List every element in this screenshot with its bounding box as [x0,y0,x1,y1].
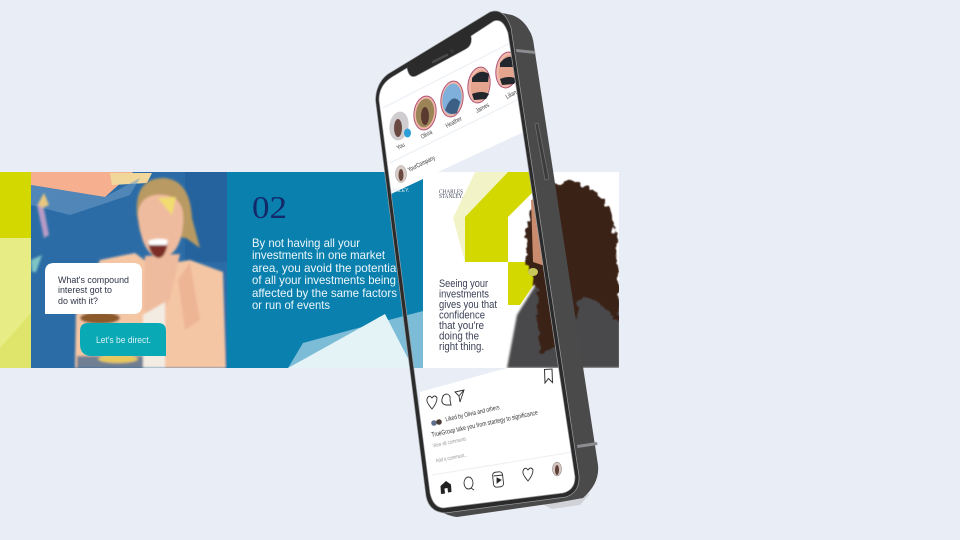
body text: affected by the same factors [252,287,397,300]
body text: area, you avoid the potential [252,262,399,275]
phone screen: stories header [380,21,522,194]
body text: or run of events [252,299,330,312]
caption: Seeing your [439,278,488,290]
panel: blue statistic card [227,172,423,368]
icon: send [455,390,464,402]
caption [439,278,497,353]
phone side body [440,12,598,517]
chat bubble: question [45,263,142,314]
story: James [467,66,491,113]
body text [252,237,399,312]
post author: YourCompany [407,155,437,174]
chat bubble: question: interest got to [58,285,112,296]
icon: profile avatar [552,462,562,476]
story: You: You [396,142,406,152]
liked by row: Liked by Olivia and others [445,405,500,424]
add comment: Add a comment... [435,452,468,465]
story: You [389,112,411,150]
icon: reels [492,472,504,487]
body text: of all your investments being [252,274,396,287]
chat bubble: answer [80,323,166,356]
chat bubble: question: What's compound [58,275,129,286]
icon: comment [442,394,451,405]
caption: gives you that [439,299,497,311]
post caption: TrueGroup take you from startegy to significance [431,410,539,439]
body text: investments in one market [252,249,386,262]
caption: that you're [439,320,484,332]
chat bubble: answer: Let's be direct. [96,335,151,346]
story: James: James [475,102,491,115]
number: 02 [252,189,287,225]
story: Lilian: Lilian [505,90,518,101]
phone screen: post actions and tab bar [420,368,574,508]
post author [396,155,437,182]
icon: heart [427,396,437,409]
body text: By not having all your [252,237,360,250]
infographic canvas [0,10,619,517]
phone screen: stories header: STANLEY. [386,188,409,194]
story: Olivia [413,96,437,138]
view comments: View all comments [432,436,467,450]
chat bubble: question: do with it? [58,296,98,307]
panel: white card with lime shapes and portrait [423,172,620,368]
speaker and camera [433,49,454,62]
story: Heather: Heather [445,116,463,130]
caption: doing the [439,330,479,342]
antenna bands [516,49,598,448]
story: Heather [440,80,464,128]
panel: lime colour strip [0,172,31,368]
phone front frame [376,11,579,513]
logo [439,190,463,198]
icon: home [440,481,452,494]
caption: right thing. [439,341,484,353]
logo: STANLEY. [439,194,463,200]
icon: search [464,477,474,490]
phone mockup [370,10,598,520]
caption: investments [439,288,490,300]
side button [535,123,549,180]
story: Lilian [495,52,517,99]
panel: photo with woman and chat bubbles [31,172,227,368]
icon: activity heart [523,468,533,481]
story: Olivia: Olivia [420,129,434,141]
icon: bookmark [544,369,552,383]
portrait [507,182,620,368]
logo: CHARLES [439,190,463,196]
bottom edge reflection [540,494,590,509]
caption: confidence [439,310,485,322]
